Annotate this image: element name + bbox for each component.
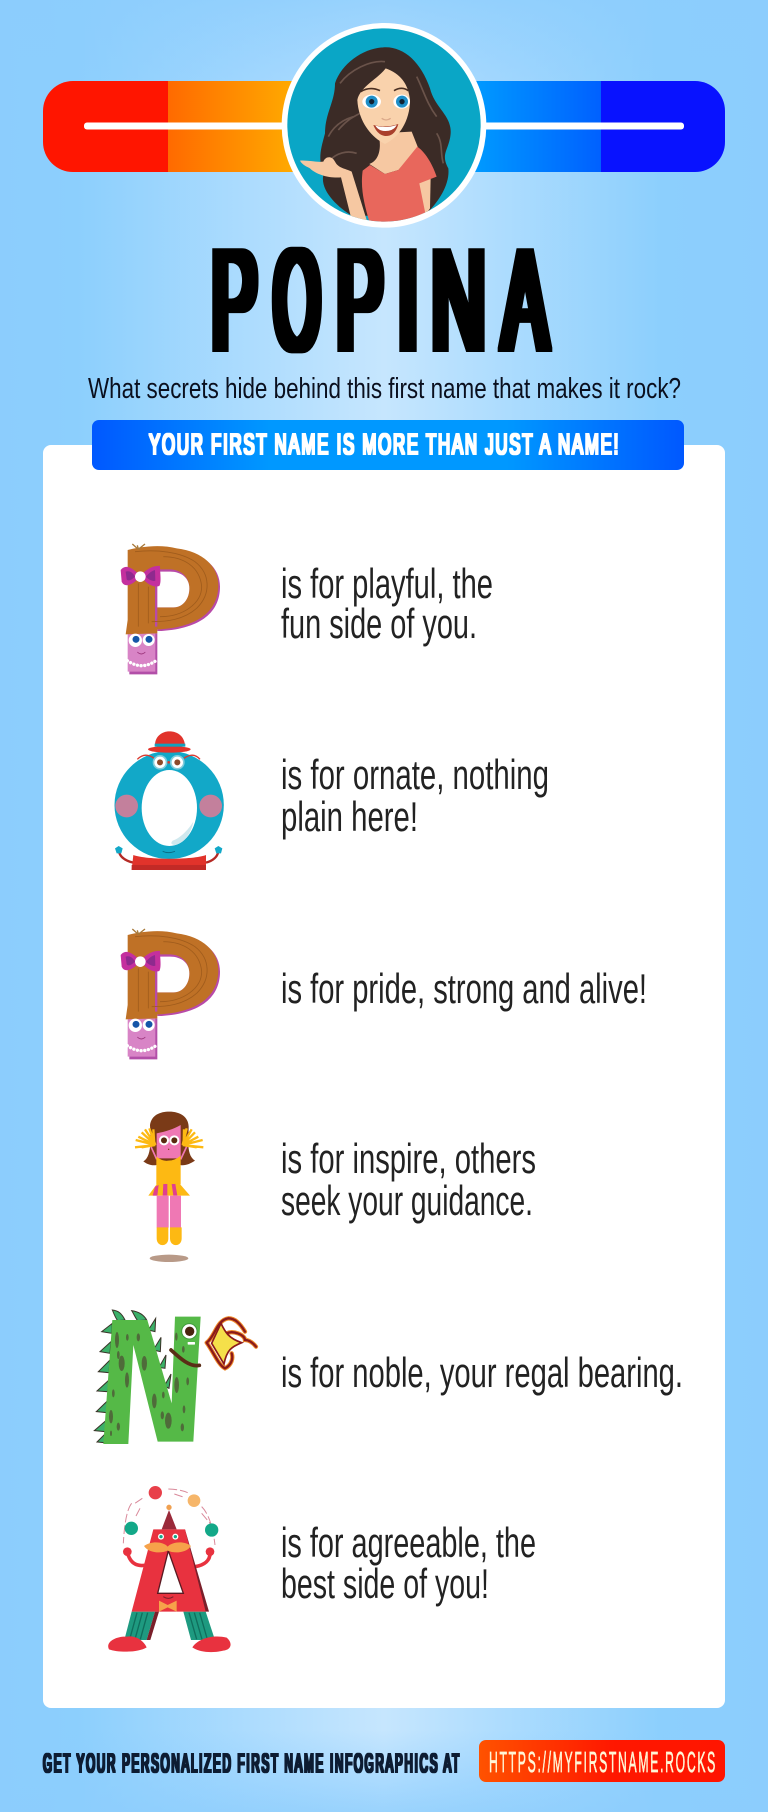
icon: letter P with hair and bow xyxy=(121,544,220,674)
avatar: woman in circle xyxy=(282,23,486,228)
text: I line xyxy=(281,1135,536,1224)
text: P line xyxy=(281,560,493,647)
neck and chest xyxy=(369,132,418,174)
icon: letter N dragon xyxy=(94,1310,256,1444)
text: O line: is for ornate, nothing xyxy=(281,751,549,798)
text: A xyxy=(502,219,548,381)
footer url button xyxy=(479,1740,725,1782)
shirt xyxy=(362,147,437,224)
title: I xyxy=(397,219,419,381)
text: A line: best side of you! xyxy=(281,1560,489,1607)
text: I line: is for inspire, others xyxy=(281,1135,536,1182)
title: N xyxy=(431,219,486,381)
text: I line: seek your guidance. xyxy=(281,1177,533,1224)
icon: letter I cheerleader xyxy=(135,1112,203,1262)
title: P xyxy=(212,219,257,381)
text: A line xyxy=(281,1519,536,1607)
icon: letter A clown juggling xyxy=(108,1486,231,1652)
text: P line: fun side of you. xyxy=(281,600,477,647)
header colour bar xyxy=(43,81,725,172)
icon: letter P with hair and bow, second xyxy=(121,929,220,1059)
icon: letter O with hat and glasses xyxy=(114,731,224,870)
title: P xyxy=(337,219,383,381)
text: A line: is for agreeable, the xyxy=(281,1519,536,1566)
text: O line: plain here! xyxy=(281,793,418,840)
banner xyxy=(92,420,684,470)
title: O xyxy=(274,219,320,381)
white content panel xyxy=(43,445,725,1708)
text: P line: is for playful, the xyxy=(281,560,493,607)
text: O line xyxy=(281,751,549,840)
hair xyxy=(320,47,451,217)
face xyxy=(357,68,410,144)
arms xyxy=(414,179,431,217)
